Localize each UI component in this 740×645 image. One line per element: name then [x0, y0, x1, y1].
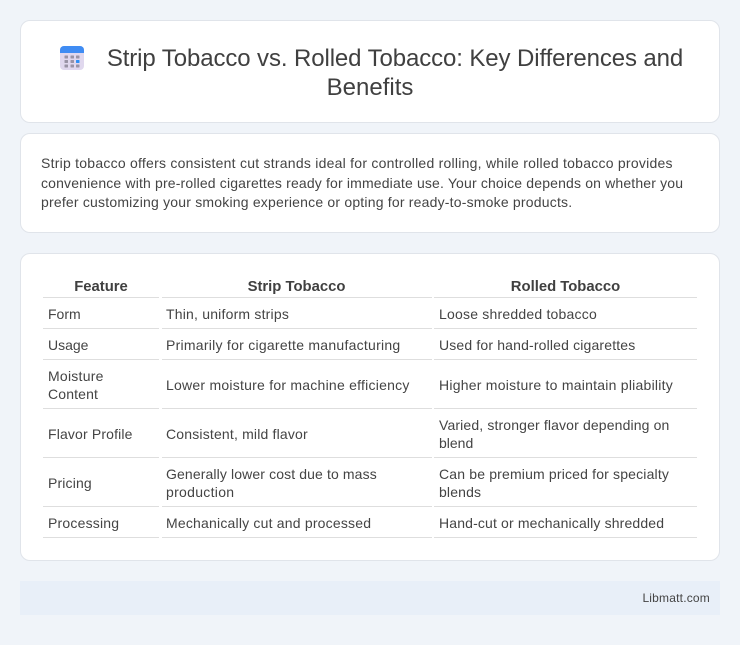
panel: title card [20, 20, 720, 123]
row: flavor profile: Flavor Profile [48, 426, 133, 442]
row: processing: Mechanically cut and processed [166, 515, 371, 531]
row: flavor profile: blend [439, 435, 473, 451]
intro paragraph [41, 155, 683, 210]
title: Benefits [327, 74, 413, 101]
row: pricing: Generally lower cost due to mass [166, 466, 377, 482]
row: processing: Processing [48, 515, 119, 531]
row: form: Form [48, 306, 81, 322]
table header: Rolled Tobacco [511, 279, 620, 295]
row: form: Loose shredded tobacco [439, 306, 597, 322]
panel: intro text [20, 133, 720, 233]
row: usage: Usage [48, 337, 88, 353]
row: usage: Primarily for cigarette manufacturing [166, 337, 400, 353]
row: form: Thin, uniform strips [166, 306, 289, 322]
row: pricing: Pricing [48, 475, 92, 491]
footer credit: Libmatt.com [642, 591, 710, 605]
row: pricing: blends [439, 484, 481, 500]
row: form [48, 306, 597, 322]
panel: comparison table [20, 253, 720, 561]
row: moisture content: Lower moisture for machine efficiency [166, 377, 410, 393]
intro paragraph: convenience with pre-rolled cigarettes ready for immediate use. Your choice depends on whether you [41, 174, 683, 190]
intro paragraph: Strip tobacco offers consistent cut strands ideal for controlled rolling, while rolled tobacco provides [41, 155, 673, 171]
table header: Strip Tobacco [248, 279, 345, 295]
row: pricing: production [166, 484, 234, 500]
row: pricing [48, 466, 669, 500]
row: processing: Hand-cut or mechanically shredded [439, 515, 664, 531]
row: pricing: Can be premium priced for specialty [439, 466, 669, 482]
title [107, 45, 683, 101]
row: moisture content [48, 368, 673, 402]
row: flavor profile [48, 417, 669, 451]
table header [74, 279, 620, 295]
row: flavor profile: Consistent, mild flavor [166, 426, 308, 442]
row: usage: Used for hand-rolled cigarettes [439, 337, 635, 353]
row: moisture content: Content [48, 386, 98, 402]
intro paragraph: prefer customizing your smoking experience or opting for ready-to-smoke products. [41, 194, 572, 210]
row: processing [48, 515, 664, 531]
row: moisture content: Moisture [48, 368, 104, 384]
footer bar [20, 581, 720, 615]
row: usage [48, 337, 635, 353]
table header: Feature [74, 279, 128, 295]
icon: calendar [60, 46, 84, 70]
row: flavor profile: Varied, stronger flavor depending on [439, 417, 669, 433]
row: moisture content: Higher moisture to maintain pliability [439, 377, 673, 393]
title: Strip Tobacco vs. Rolled Tobacco: Key Differences and [107, 45, 683, 72]
